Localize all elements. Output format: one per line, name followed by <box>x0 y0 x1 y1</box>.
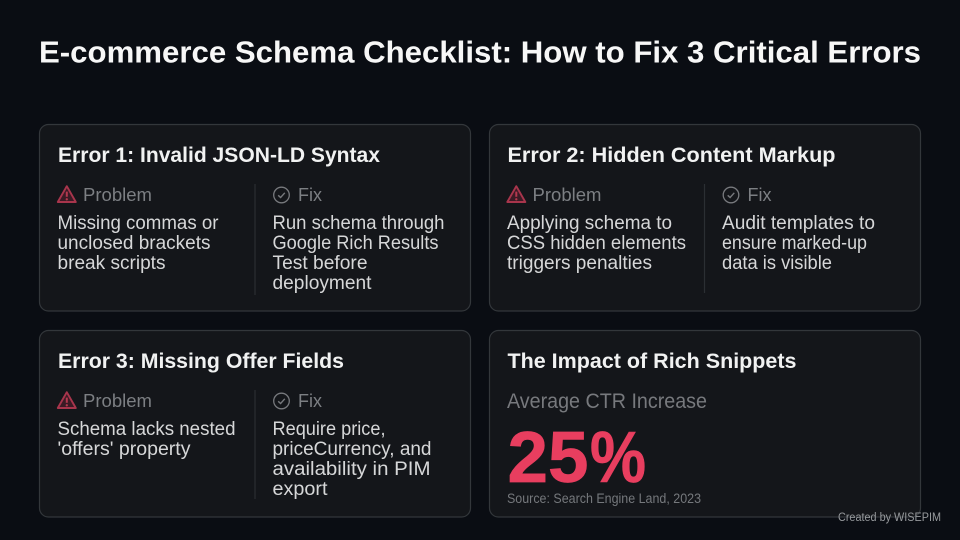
text: problem description: Schema lacks nested <box>58 419 236 440</box>
text: problem description: 'offers' property <box>58 439 191 460</box>
label: fix: Fix <box>748 184 772 205</box>
text: fix description: data is visible <box>722 253 832 274</box>
credit: Created by WISEPIM <box>838 512 941 524</box>
title: E-commerce Schema Checklist: How to Fix 3 Critical Errors <box>39 34 921 70</box>
text: fix description: ensure marked-up <box>722 233 867 254</box>
icon: warning <box>58 186 76 202</box>
text: fix description: Require price, <box>272 419 386 440</box>
stat: 25%: % <box>590 418 646 498</box>
text: fix description: availability in PIM <box>272 459 430 480</box>
text: problem description <box>58 213 219 274</box>
panel: error 1 <box>40 124 470 311</box>
label: average CTR increase: Average CTR Increase <box>507 389 707 413</box>
text: problem description: Missing commas or <box>58 213 219 234</box>
source: Source: Search Engine Land, 2023 <box>507 491 701 506</box>
heading: error 3: Error 3: Missing Offer Fields <box>58 349 344 373</box>
text: problem description: triggers penalties <box>507 253 652 274</box>
text: problem description: break scripts <box>58 253 166 274</box>
heading: error 1: Error 1: Invalid JSON-LD Syntax <box>58 143 380 167</box>
panel: impact of rich snippets <box>490 330 920 517</box>
text: problem description <box>507 213 686 274</box>
label: fix: Fix <box>298 184 323 205</box>
panel: error 3 <box>40 330 470 517</box>
heading: error 2: Error 2: Hidden Content Markup <box>508 143 836 167</box>
text: fix description <box>272 213 444 294</box>
text: fix description: Test before <box>272 253 368 274</box>
icon: check <box>723 187 739 203</box>
label: fix: Fix <box>298 390 323 411</box>
text: fix description: export <box>272 479 328 500</box>
text: fix description <box>722 213 875 274</box>
text: fix description: deployment <box>272 273 372 294</box>
text: problem description: unclosed brackets <box>58 233 210 254</box>
icon: warning <box>58 392 76 408</box>
text: fix description: Audit templates to <box>722 213 875 234</box>
label: problem: Problem <box>83 184 152 205</box>
text: fix description: Run schema through <box>272 213 444 234</box>
text: problem description: CSS hidden elements <box>507 233 686 254</box>
panel: error 2 <box>490 124 920 311</box>
text: fix description <box>272 419 432 500</box>
text: fix description: priceCurrency, and <box>272 439 432 460</box>
heading: impact: The Impact of Rich Snippets <box>508 349 797 373</box>
icon: check <box>274 187 289 203</box>
text: problem description <box>58 419 236 460</box>
icon: warning <box>507 186 525 202</box>
label: problem: Problem <box>532 184 602 205</box>
stat: 25%: 25 <box>508 418 588 498</box>
text: fix description: Google Rich Results <box>272 233 438 254</box>
text: problem description: Applying schema to <box>507 213 672 234</box>
stat: 25% <box>508 418 646 498</box>
icon: check <box>274 393 289 409</box>
label: problem: Problem <box>83 390 152 411</box>
